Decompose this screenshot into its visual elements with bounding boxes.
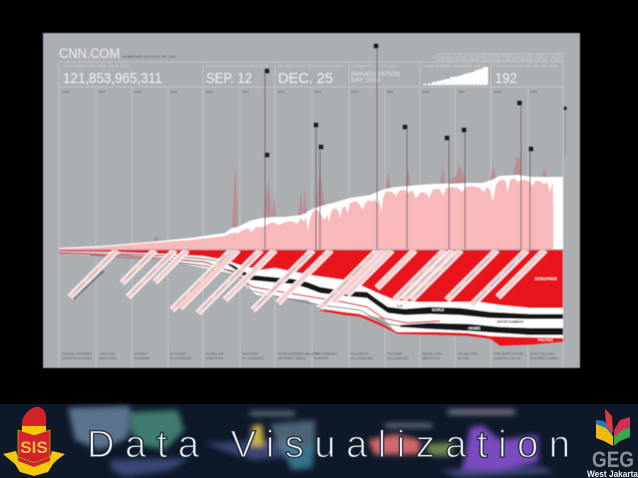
stat: global internet users bar chart [423,64,488,85]
stat: Inauguration Day 2009 [351,64,400,84]
stream labels: WORLD [432,308,445,312]
bottom milestone labels: BLOGS [458,356,469,360]
bottom milestone labels: GROWTH OF SITES [62,356,92,360]
banner title: Data Visualization [87,424,570,466]
stream labels: ENTERTAINMENT [497,320,524,324]
year labels: 2001 [242,90,249,94]
stream: thin red line [59,253,440,323]
bottom milestone labels: ANNUAL INTERNET [62,352,92,356]
stream: world black band [225,262,563,319]
top-right caption text: THE RED FIELD SHOWS THE SHARE OF STORY TYPES ACROSS THE YEARS OF THE SITE [432,55,563,59]
panel: CNN.com infographic [43,33,580,368]
stat: 192 [495,64,557,87]
year labels: 2009 [530,90,537,94]
bottom milestone labels: IS LAUNCHED [242,356,264,360]
stat: Inauguration Day 2009: INAUGURATION [351,71,400,78]
year labels: 2006 [422,90,429,94]
stream: grey line [90,255,400,326]
bottom milestone labels: 10 MILLION [206,352,224,356]
bottom milestone labels: 100 MILLION [422,352,442,356]
bottom milestone labels: FOUNDED [134,356,150,360]
icon: school crest [3,407,65,476]
stat: total page views [63,64,162,87]
stream graph: story categories [59,250,563,346]
bottom milestone labels: 1 MILLION [99,352,115,356]
stat: 192: 192 [495,71,517,87]
bottom milestone labels: IS LAUNCHED [387,356,409,360]
milestone caption: ANNUAL INTERNET GROWTH OF SITES [72,269,105,301]
year labels [62,90,537,94]
bottom milestone labels: ADOPTS A BLOG [494,356,521,360]
stat: Sep. 12: SEP. 12 [206,71,252,87]
bottom milestone labels: FACEBOOK [351,352,370,356]
bottom milestone labels: WEB SITES [99,356,117,360]
spikes: traffic peaks [153,155,547,241]
icon: GEG West Jakarta logo [587,409,638,478]
bottom milestone labels: FOUR HUNDRED MILLION [278,352,319,356]
stream labels: POLITICS [538,338,553,342]
stat: Sep. 12: DAY WITH MOST TRAFFIC FOR 1 YEAR [206,64,268,68]
map shapes and point clouds [68,406,555,478]
year labels: 1999 [170,90,177,94]
bottom milestone labels: INTERNET USERS [530,356,558,360]
stream labels: WORLD PAGE [535,277,557,281]
year labels: 2007 [458,90,465,94]
bottom milestone labels: BLOGGER [170,352,187,356]
bottom milestone labels: GOOGLE [134,352,148,356]
stat: Inauguration Day 2009: LARGEST DAY EVER 2009 [351,64,395,68]
bottom milestone labels: THE WHITE HOUSE [494,352,524,356]
stream: world news red field [59,250,563,308]
stream: thin dark line [120,254,225,262]
stream: lower black band [400,323,563,335]
banner [0,404,638,478]
title [59,46,176,61]
year labels: 2008 [494,90,501,94]
bottom milestone labels: INTERNET USERS [278,356,306,360]
bottom milestone labels: SNAPFISH [242,352,259,356]
year labels: 2000 [206,90,213,94]
bottom milestone labels: IS LAUNCHED [170,356,192,360]
stream: politics red [320,309,563,346]
stat: total page views: PAGE VIEWS 8/95 - DEC. 09/15, 2009 [63,64,129,68]
title: HOMEPAGE HISTORY ON 1995 [122,55,176,59]
stat: Dec. 25: DEC. 25 [278,71,333,87]
stat: Dec. 25: DAY WITH LEAST TRAFFIC FOR 1 YEAR [278,64,343,68]
top-right caption text: MILESTONES OF THE INTERNET ARE MARKED ALONG THE TIMELINE FROM LEFT TO RIGHT [436,58,563,62]
area chart: homepage traffic [59,175,563,249]
year labels: 1996 [62,90,69,94]
stat: Sep. 12 [206,64,268,87]
bottom milestone labels: YOUTUBE [387,352,403,356]
title: CNN.COM [59,46,120,61]
icon: school crest: SIS [20,438,48,457]
bottom milestone labels: THE INTERNET [314,352,337,356]
event markers: vertical lines with numbered squares [264,44,567,249]
top-right caption text [432,52,563,62]
stat: Inauguration Day 2009: DAY 2009 [351,77,381,84]
stat: total page views: 121,853,965,311 [63,71,162,87]
milestone bands: diagonal pink ribbons [70,250,545,313]
year labels: 2002 [278,90,285,94]
year labels: 1998 [134,90,141,94]
bottom milestone labels: EIGHT BILLION [530,352,554,356]
stream labels: U.S. [397,304,403,308]
stream labels: CRIMES [468,326,480,330]
year labels: 1997 [98,90,105,94]
year labels: 2003 [314,90,321,94]
bottom milestone labels: IS LAUNCHED [351,356,373,360]
year labels: 2004 [351,90,358,94]
stat: Dec. 25 [278,64,343,87]
bottom milestone labels: WEB SITES [422,356,440,360]
bottom milestone labels: THRIVES [314,356,328,360]
year labels: 2005 [386,90,393,94]
bottom milestone labels [62,352,558,360]
stat: 192: COUNTRIES VISITING CNN.COM, 2009 [495,64,557,68]
stream halo: white gaps [59,250,563,345]
top-right caption text: EACH DAY OF THE CNN.COM HOMEPAGE HAS BEEN MAPPED BY PAGE VIEWS AND STORIES [438,52,563,56]
stat: global internet users bar chart: GLOBAL INTERNET USERS 1995 - 2009 [423,64,481,68]
bottom milestone labels: 100 MILLION [458,352,478,356]
bottom milestone labels: WEB SITES [206,356,224,360]
stream labels [397,277,557,342]
